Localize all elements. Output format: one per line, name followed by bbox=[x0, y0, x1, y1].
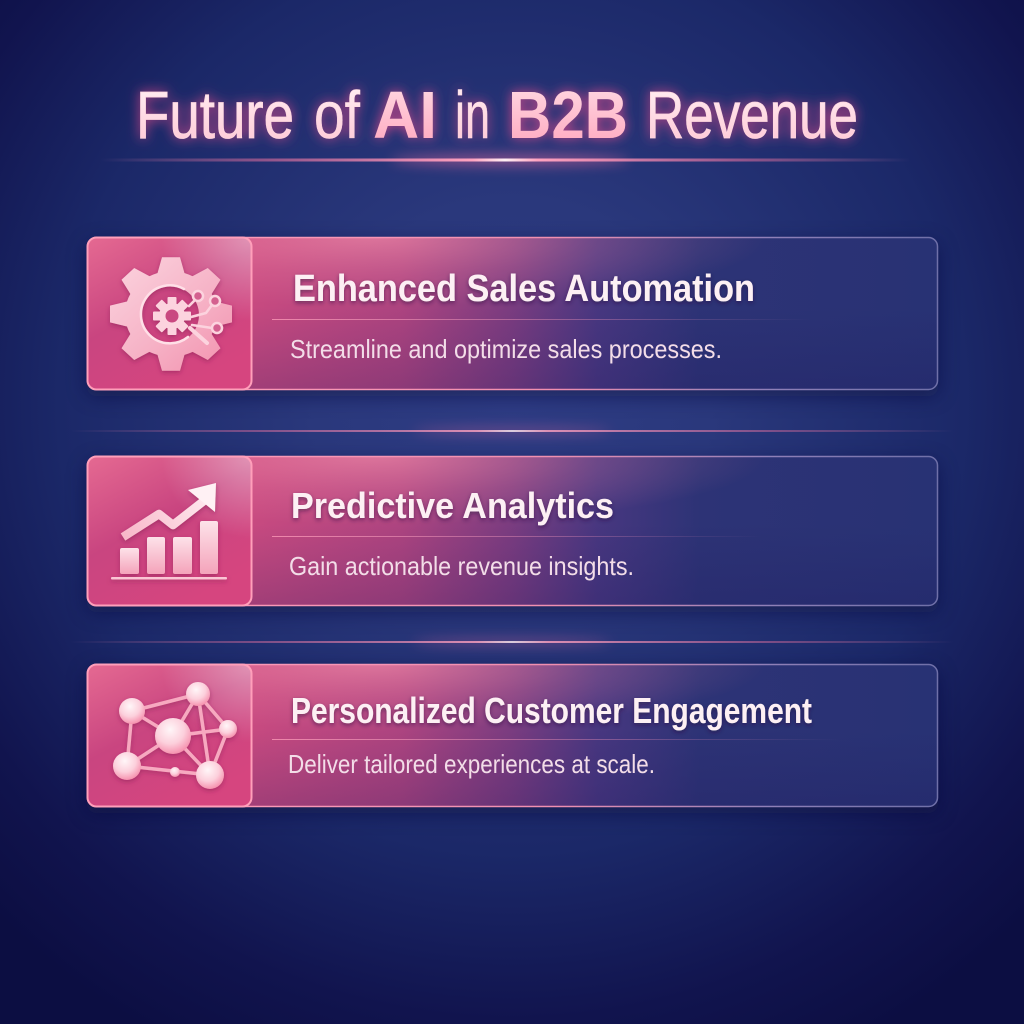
title: Future bbox=[136, 78, 294, 153]
icon tile bbox=[87, 237, 252, 390]
title: AI bbox=[373, 78, 437, 153]
heading: Predictive Analytics bbox=[291, 485, 614, 526]
card body bbox=[87, 237, 938, 396]
panel: enhanced sales automation bbox=[87, 237, 938, 396]
title: of bbox=[314, 78, 360, 153]
icon tile bbox=[87, 664, 252, 807]
panel: predictive analytics bbox=[87, 456, 938, 612]
heading: Personalized Customer Engagement bbox=[291, 690, 812, 731]
title: Revenue bbox=[646, 78, 858, 153]
icon tile bbox=[87, 456, 252, 606]
title bbox=[136, 78, 858, 153]
description: Streamline and optimize sales processes. bbox=[290, 334, 722, 364]
description: Gain actionable revenue insights. bbox=[289, 551, 634, 581]
panel: personalized customer engagement bbox=[87, 664, 938, 813]
description: Deliver tailored experiences at scale. bbox=[288, 749, 655, 779]
title: in bbox=[455, 78, 490, 153]
separator glow 1 bbox=[70, 427, 954, 435]
icon: rising bar chart bbox=[111, 483, 227, 580]
title underline glow bbox=[100, 154, 910, 166]
icon: connected network bbox=[113, 682, 237, 789]
icon: gear with circuit bbox=[108, 257, 234, 374]
title: B2B bbox=[508, 78, 628, 153]
card body bbox=[87, 664, 938, 813]
separator glow 2 bbox=[70, 638, 954, 646]
heading: Enhanced Sales Automation bbox=[293, 268, 755, 310]
card body bbox=[87, 456, 938, 612]
